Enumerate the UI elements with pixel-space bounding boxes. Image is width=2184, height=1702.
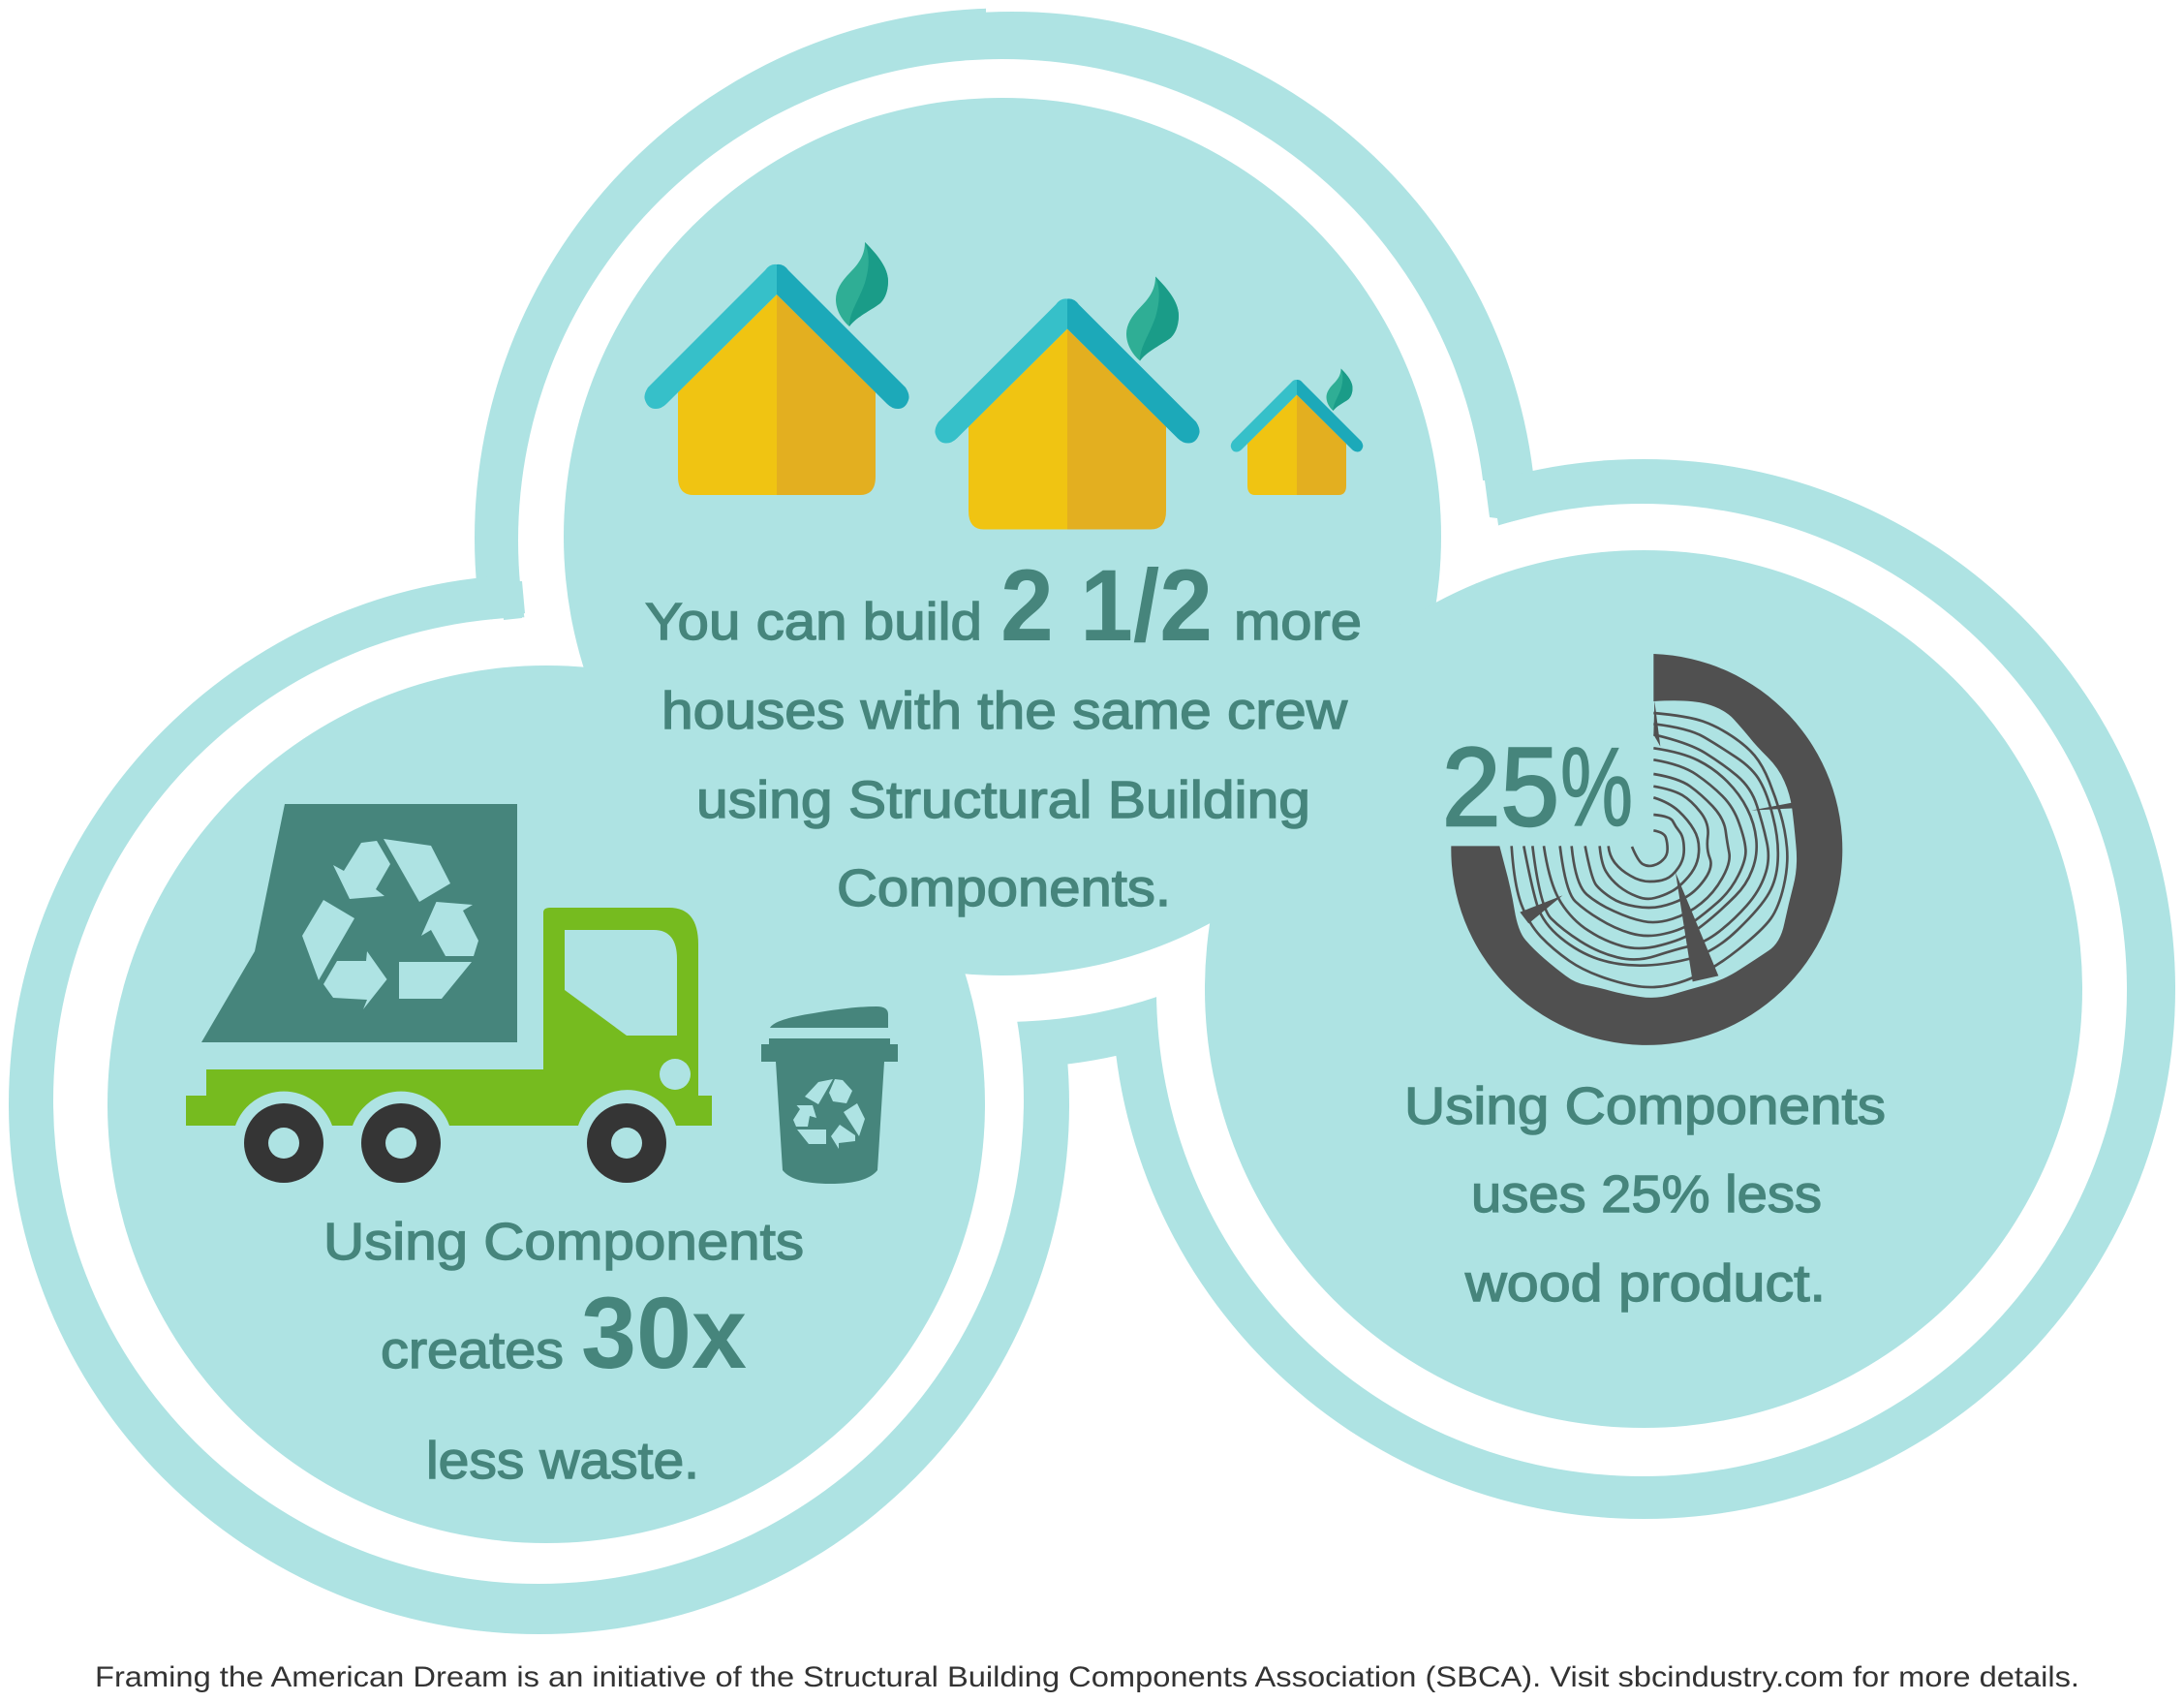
text block: wood statement: wood product.: [1464, 1254, 1826, 1313]
truck body: [186, 908, 712, 1126]
text block: houses statement: [645, 549, 1362, 917]
text block: wood statement: [1404, 1077, 1886, 1313]
panel: top circle: [564, 98, 1441, 975]
wheels: [244, 1103, 666, 1183]
text block: houses statement: You can build: [645, 593, 982, 651]
big number: 2 1/2: 2 1/2: [1000, 549, 1213, 663]
big number: 25%: 25: [1442, 726, 1559, 850]
text block: wood statement: Using Components: [1404, 1077, 1886, 1135]
recycling symbol on cargo: [302, 839, 478, 1009]
text block: waste statement: creates: [381, 1321, 564, 1379]
text block: waste statement: less waste.: [426, 1432, 699, 1490]
icon: recycling truck: [186, 804, 712, 1183]
truck window: [565, 930, 677, 1036]
panel: left circle: [108, 665, 985, 1543]
text block: houses statement: using Structural Building: [696, 771, 1310, 829]
tree rings: [1512, 713, 1787, 987]
text block: waste statement: [323, 1213, 804, 1490]
big number: 30x: 30x: [581, 1277, 747, 1390]
text block: waste statement: Using Components: [323, 1213, 804, 1271]
icon: second house with leaf: [935, 277, 1200, 529]
headlight: [660, 1059, 691, 1090]
truck cargo box: [201, 804, 517, 1042]
text block: houses statement: Components.: [837, 859, 1171, 917]
icon: small half house with leaf: [1231, 368, 1363, 495]
chart: tree log cross-section with missing quarter: [1451, 654, 1842, 1045]
panel: right circle: [1205, 550, 2082, 1428]
log bark: [1451, 654, 1842, 1045]
log cracks: [1520, 700, 1794, 981]
text block: wood statement: uses 25% less: [1471, 1165, 1822, 1223]
icon: large house with leaf: [644, 242, 909, 495]
footer note: Framing the American Dream is an initiative of the Structural Building Components Association (SBCA). Visit sbcindustry.com for more details.: [95, 1661, 2079, 1693]
text block: houses statement: houses with the same crew: [661, 682, 1348, 740]
big number: 25%: [1442, 726, 1633, 850]
icon: recycling bin: [761, 1006, 898, 1184]
big number: 25%: %: [1560, 726, 1633, 850]
text block: houses statement: more: [1234, 593, 1362, 651]
